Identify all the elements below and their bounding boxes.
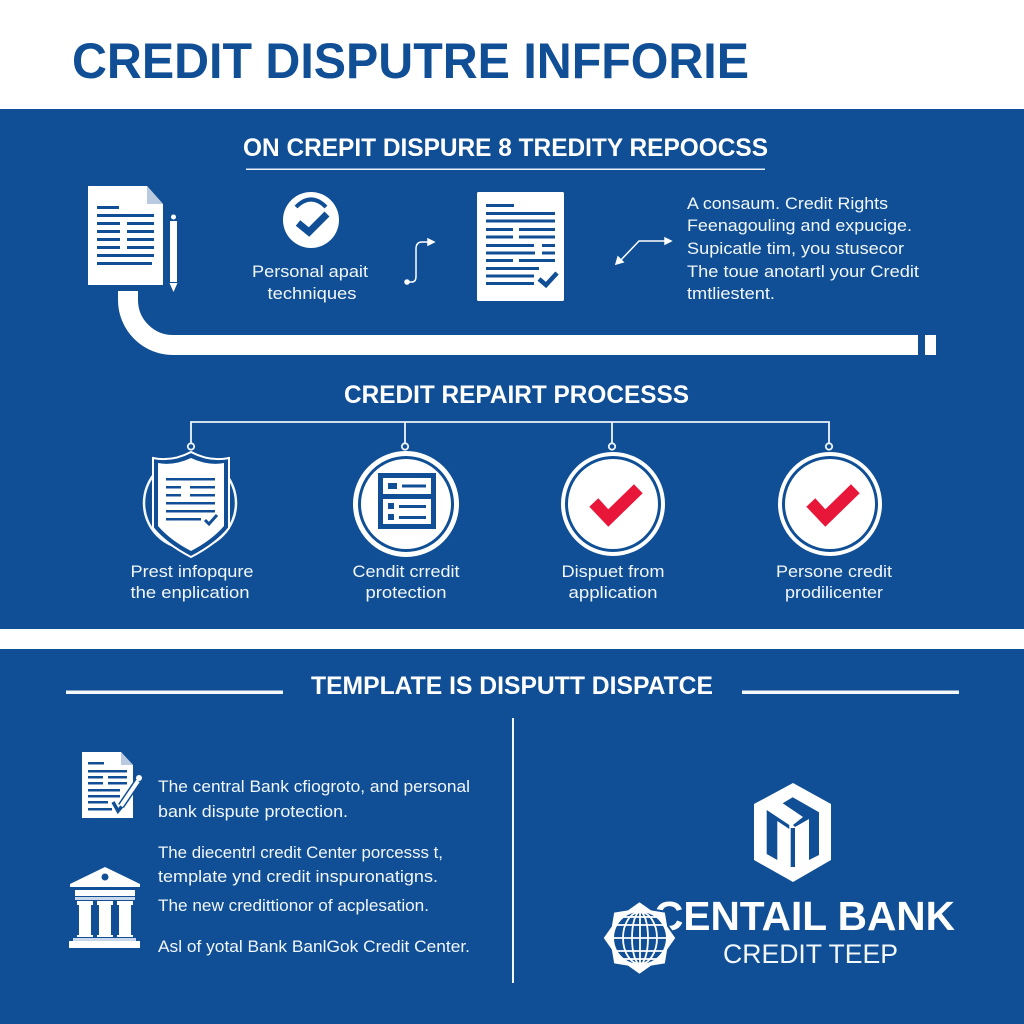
label: step 4: prodilicenter xyxy=(785,583,883,602)
label: step 2 xyxy=(352,562,460,602)
label: step 4 xyxy=(776,562,892,602)
icon: document with pen xyxy=(88,186,178,292)
text: bank notes: bank dispute protection. xyxy=(158,802,348,821)
label: step 2: protection xyxy=(366,583,446,602)
text: bank notes: The diecentrl credit Center porcesss t, xyxy=(158,843,443,862)
text: bank notes: The new credittionor of acplesation. xyxy=(158,896,429,915)
panel: lower blue section xyxy=(0,649,1024,1024)
panel: upper blue section xyxy=(0,109,1024,629)
icon: shield document xyxy=(144,452,236,557)
icon: bank building xyxy=(69,867,140,948)
divider xyxy=(512,718,514,983)
text: personal techniques xyxy=(252,262,368,303)
logo: bank name: CREDIT TEEP xyxy=(723,939,898,969)
label: step 1: Prest infopqure xyxy=(130,562,254,581)
arrow: squiggle connector xyxy=(405,239,434,284)
progress pipe xyxy=(128,291,936,355)
label: step 3: Dispuet from xyxy=(562,562,664,581)
text: personal techniques: Personal apait xyxy=(252,262,368,281)
logo: hexagon mark xyxy=(754,783,831,882)
label: step 1: the enplication xyxy=(130,583,250,602)
label: step 3: application xyxy=(568,583,658,602)
heading: credit repair process: CREDIT REPAIRT PROCESSS xyxy=(344,381,689,409)
title: CREDIT DISPUTRE INFFORIE xyxy=(72,33,749,89)
icon: document with check and pen xyxy=(82,752,142,818)
heading: template section: TEMPLATE IS DISPUTT DISPATCE xyxy=(311,672,713,700)
text: consumer credit rights: Feenagouling and expucige. xyxy=(687,216,912,235)
icon: checked document xyxy=(477,192,564,301)
text: bank notes: template ynd credit inspuronatigns. xyxy=(158,867,438,886)
logo: bank name: CENTAIL BANK xyxy=(654,893,955,939)
connector tree xyxy=(188,422,832,450)
text: consumer credit rights: Supicatle tim, you stusecor xyxy=(687,239,904,258)
icon: form circle xyxy=(354,452,458,556)
logo: bank name xyxy=(654,893,955,969)
text: bank notes xyxy=(158,777,470,956)
icon: check badge xyxy=(283,192,339,248)
text: bank notes: The central Bank cfiogroto, and personal xyxy=(158,777,470,796)
label: step 2: Cendit crredit xyxy=(352,562,460,581)
label: step 4: Persone credit xyxy=(776,562,892,581)
text: personal techniques: techniques xyxy=(268,284,356,303)
text: consumer credit rights: A consaum. Credit Rights xyxy=(687,194,888,213)
arrow: diagonal connector xyxy=(616,238,671,264)
icon: globe xyxy=(602,901,676,975)
icon: red check circle 2 xyxy=(778,452,882,556)
text: consumer credit rights: The toue anotartl your Credit xyxy=(687,262,919,281)
text: consumer credit rights: tmtliestent. xyxy=(687,284,775,303)
text: consumer credit rights xyxy=(687,194,919,303)
label: step 1 xyxy=(130,562,254,602)
heading: top section: ON CREPIT DISPURE 8 TREDITY REPOOCSS xyxy=(243,134,768,162)
heading: template section xyxy=(66,672,959,700)
icon: red check circle 1 xyxy=(561,452,665,556)
label: step 3 xyxy=(562,562,664,602)
text: bank notes: Asl of yotal Bank BanlGok Credit Center. xyxy=(158,937,470,956)
